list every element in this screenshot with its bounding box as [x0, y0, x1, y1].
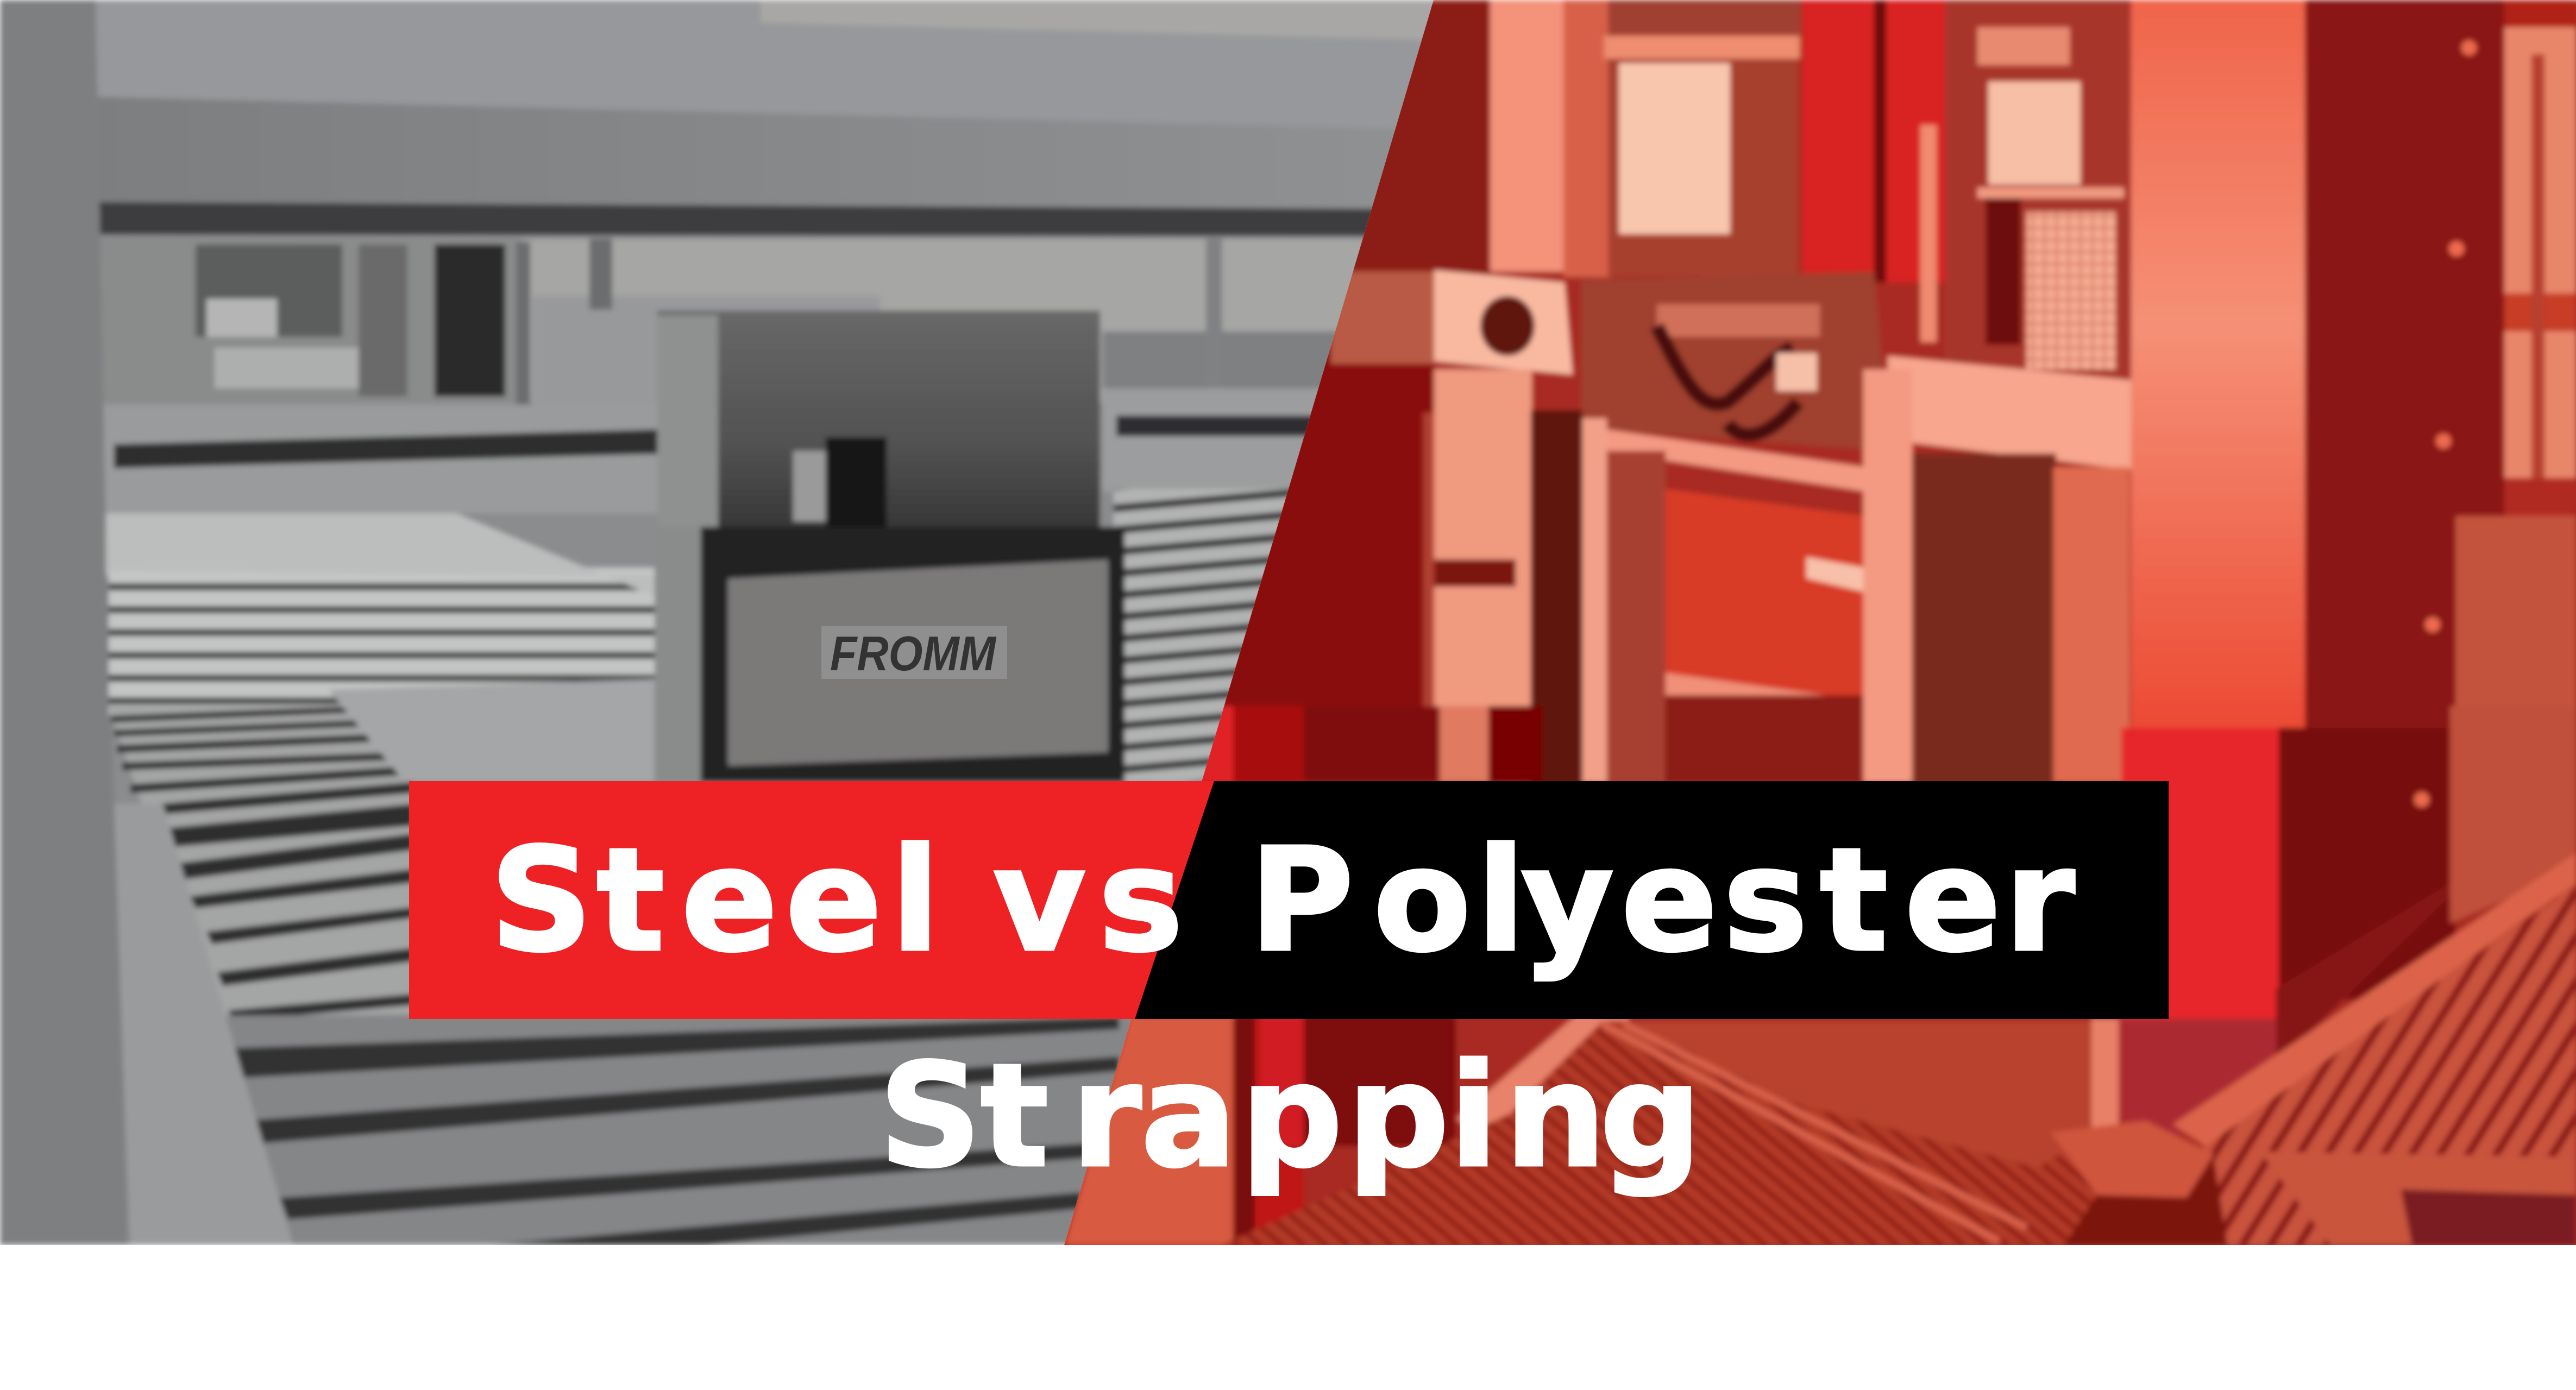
dark mechanism box: [1912, 454, 2056, 785]
frame bottom beam: [1651, 671, 1864, 728]
lower left strips: [1032, 706, 1304, 1249]
machine head: [657, 311, 1100, 566]
lower dark column: [1304, 706, 1440, 782]
brand plate: FROMM: [830, 627, 997, 681]
lower left conveyor slats: [109, 706, 413, 1027]
distant building: [532, 296, 880, 405]
red doors: [1802, 0, 1945, 282]
dark steel beam: [98, 202, 1467, 236]
wire grid panel: [2026, 212, 2116, 369]
flat plate: [106, 513, 657, 597]
right lower panel: [2450, 706, 2576, 923]
dark slats: [111, 706, 413, 1021]
red box label: [1806, 557, 1864, 592]
machine head side: [657, 315, 718, 527]
purple wall: [2119, 1019, 2276, 1157]
sky behind hall: [522, 239, 1445, 402]
upper ceiling band: [92, 0, 1467, 130]
upper conveyor stripes: [109, 568, 657, 714]
vertical post: [1863, 369, 1912, 782]
machine panel: [728, 559, 1108, 766]
low wall: [103, 405, 668, 513]
machine base side: [655, 527, 703, 782]
lower ceiling beam: [98, 98, 513, 204]
narrow dark column: [1531, 410, 1582, 785]
dark wall strip: [114, 429, 668, 468]
bolts: [2414, 40, 2477, 807]
pillar lower bright: [2121, 728, 2279, 1037]
title banner: [409, 781, 2169, 1019]
dark pillar lower: [2276, 880, 2455, 1065]
paper sheets on conveyor: [106, 513, 657, 608]
red box: [1665, 489, 1864, 701]
big lower slats: [217, 1010, 1141, 1245]
right low wall: [1102, 387, 1318, 492]
metal mesh floor: [1222, 1021, 2119, 1245]
pictogram: [1480, 296, 1535, 356]
horizontal beam: [1888, 356, 2132, 470]
dark pillar: [2305, 0, 2504, 728]
distant railing: [1101, 329, 1335, 391]
far right floor: [2455, 516, 2576, 896]
far right shelves: [2504, 0, 2576, 516]
dark red column: [1304, 0, 1491, 304]
left pillar: [0, 0, 128, 1245]
machine foot fragment: [1456, 1016, 1630, 1146]
corner block: [2051, 1121, 2214, 1198]
left lower dark column: [1195, 272, 1434, 717]
floor lighter mesh: [1630, 1021, 2091, 1168]
left light column: [1434, 369, 1532, 782]
upper shelf: [1608, 0, 1801, 36]
left rail: [114, 804, 293, 1245]
floor rails: [1603, 1024, 2026, 1241]
banner: black segment: [1135, 781, 2169, 1019]
big light pillar: [2131, 0, 2305, 728]
block shadow: [2064, 1157, 2227, 1245]
left dark upper zone: [1331, 272, 1434, 364]
white bag and shadow: [1608, 59, 1798, 276]
strips above banner: [1201, 706, 1233, 782]
right conveyor stripes: [1114, 489, 1358, 782]
machine frame: [701, 527, 1124, 782]
slanted beam: [1604, 429, 1866, 492]
cage mesh: [2173, 885, 2576, 1245]
label block: [1434, 270, 1573, 375]
diagonal rail: [2173, 853, 2576, 1146]
title line 2: Strapping: [879, 1033, 1702, 1199]
door posts: [2091, 1019, 2119, 1128]
banner: red segment: [409, 781, 1214, 1019]
photo: steel strapping machine in greyscale: [0, 0, 1472, 1245]
machine dark block: [826, 437, 887, 573]
background machinery: [193, 236, 1224, 406]
right dark strip: [1116, 416, 1334, 436]
lighter cage section: [2260, 1152, 2576, 1245]
photo: polyester strapping machine in red duotone: [1032, 0, 2576, 1249]
middle mechanism: [1581, 272, 1890, 451]
light column: [1490, 0, 1563, 272]
lighter side panel: [2053, 467, 2129, 782]
right shelf with bag: [1945, 0, 2131, 380]
sheet on conveyor: [329, 679, 657, 782]
title line 1: Steel vs Polyester: [490, 817, 2076, 983]
central lower clutter: [1607, 451, 1666, 782]
window sky at top: [761, 0, 1467, 41]
hoses: [1657, 326, 1798, 435]
